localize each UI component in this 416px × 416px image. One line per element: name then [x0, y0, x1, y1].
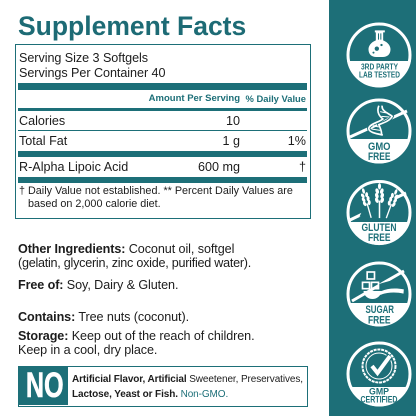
panel: certifications sidebar — [329, 0, 416, 416]
no label: NO — [26, 366, 64, 405]
badge: gmo free: FREE — [368, 151, 390, 163]
other ingredients: (gelatin, glycerin, zinc oxide, purified water). — [18, 256, 251, 270]
title: Supplement Facts — [18, 11, 246, 41]
column header: amount per serving: Amount Per Serving — [149, 93, 240, 104]
callout: no artificial — [18, 366, 308, 407]
row: r-alpha lipoic acid: † — [299, 160, 306, 174]
badge: gluten free — [348, 182, 410, 245]
badge: gmp certified: GMP — [369, 387, 389, 397]
storage: Keep in a cool, dry place. — [18, 343, 157, 357]
badge: sugar free: FREE — [368, 314, 390, 326]
badge: sugar free: SUGAR — [366, 304, 394, 316]
serving information: Serving Size 3 Softgels — [19, 51, 148, 65]
row: calories — [19, 114, 240, 128]
thick divider — [18, 177, 307, 183]
row: total fat: 1% — [288, 134, 306, 148]
storage: Storage: Keep out of the reach of children. — [18, 329, 255, 343]
row: total fat: Total Fat — [19, 134, 67, 148]
row: r-alpha lipoic acid: 600 mg — [198, 160, 240, 174]
other ingredients: Other Ingredients: Coconut oil, softgel — [18, 242, 234, 256]
badge: gmo free: GMO — [368, 141, 391, 153]
row: r-alpha lipoic acid: R-Alpha Lipoic Acid — [19, 160, 128, 174]
column header: daily value: % Daily Value — [246, 93, 306, 104]
badge: gluten free: GLUTEN — [362, 222, 397, 234]
badge: sugar free — [348, 263, 410, 326]
callout text: Artificial Flavor, Artificial Sweetener, Preservatives, — [72, 374, 303, 385]
contains: Contains: Tree nuts (coconut). — [18, 310, 189, 324]
panel: supplement facts table — [15, 44, 311, 219]
row: r-alpha lipoic acid — [19, 160, 306, 174]
row: total fat: 1 g — [222, 134, 240, 148]
other ingredients — [18, 242, 251, 270]
row: calories: Calories — [19, 114, 65, 128]
thick divider — [18, 83, 307, 90]
row: total fat — [19, 134, 306, 148]
serving information — [19, 51, 165, 80]
footnote — [19, 185, 293, 210]
footnote: based on 2,000 calorie diet. — [28, 198, 161, 210]
badge: gmp certified: CERTIFIED — [360, 394, 398, 404]
row: calories: 10 — [226, 114, 240, 128]
serving information: Servings Per Container 40 — [19, 66, 165, 80]
free of: Free of: Soy, Dairy & Gluten. — [18, 278, 178, 292]
callout text — [72, 374, 303, 400]
badge: gmo free — [348, 100, 410, 163]
storage — [18, 329, 255, 357]
thick divider — [18, 151, 307, 157]
divider — [18, 108, 307, 111]
footnote: † Daily Value not established. ** Percent Daily Values are — [19, 185, 293, 197]
badge: gmp certified — [348, 343, 410, 407]
badge: 3rd party lab tested: 3RD PARTY — [361, 61, 398, 71]
callout text: Lactose, Yeast or Fish. Non-GMO. — [72, 389, 228, 400]
divider — [18, 130, 307, 131]
badge: gluten free: FREE — [368, 232, 390, 244]
badge: 3rd party lab tested — [347, 24, 411, 87]
badge: 3rd party lab tested: LAB TESTED — [359, 70, 400, 80]
